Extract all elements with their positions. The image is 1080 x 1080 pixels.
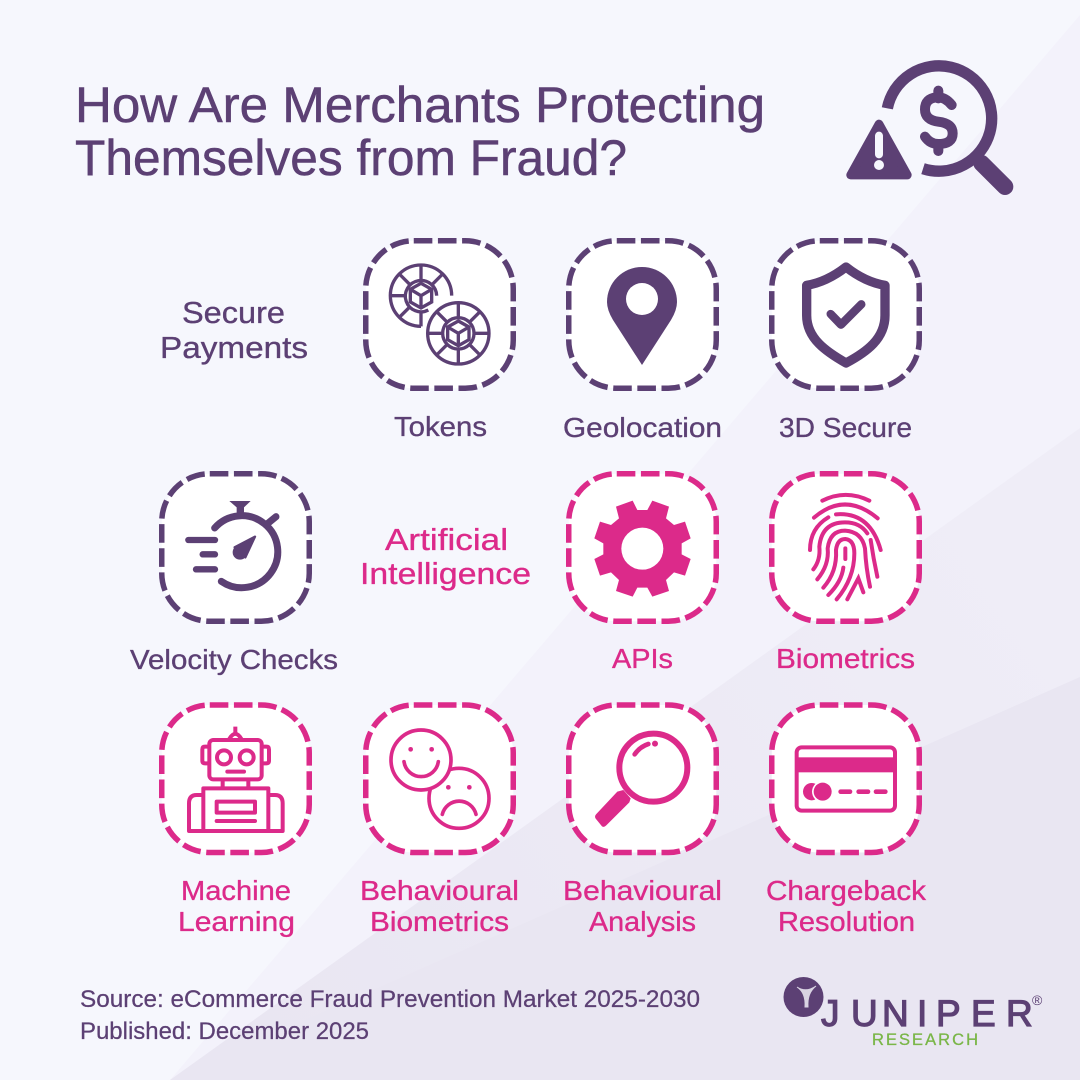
panel: Velocity Checks — [130, 474, 338, 675]
title: Themselves from Fraud? — [75, 130, 627, 186]
label: Behavioural Biometrics: Biometrics — [370, 906, 509, 937]
panel: Behavioural Analysis — [563, 705, 722, 937]
heading: Artificial Intelligence — [360, 522, 531, 591]
icon: warning triangle and dollar magnifier — [851, 66, 1005, 187]
heading: Secure Payments — [160, 295, 308, 365]
label: Behavioural Analysis — [563, 875, 722, 937]
label: Behavioural Biometrics — [360, 875, 519, 937]
panel: Behavioural Biometrics — [360, 705, 519, 937]
label: Biometrics: Biometrics — [776, 643, 915, 674]
label: Machine Learning — [178, 875, 295, 937]
heading: Artificial Intelligence: Intelligence — [360, 556, 531, 591]
icon: tokens — [390, 265, 489, 364]
icon: happy and sad faces — [391, 730, 489, 828]
panel: Tokens — [366, 241, 513, 442]
icon: robot — [189, 727, 283, 831]
title — [75, 77, 765, 186]
icon: magnifying glass — [595, 734, 687, 827]
panel: Biometrics — [772, 474, 919, 674]
source text: Source: eCommerce Fraud Prevention Market 2025-2030 — [80, 986, 700, 1013]
panel: Chargeback Resolution — [766, 705, 927, 937]
heading: Secure Payments: Secure — [182, 295, 285, 330]
label: 3D Secure: 3D Secure — [779, 412, 912, 443]
label: Tokens: Tokens — [394, 411, 487, 442]
icon: stopwatch — [188, 501, 278, 588]
label: Behavioural Analysis: Behavioural — [563, 875, 722, 906]
icon: shield — [807, 267, 885, 363]
heading: Secure Payments: Payments — [160, 330, 308, 365]
label: Chargeback Resolution — [766, 875, 927, 937]
logo: Juniper Research: RESEARCH — [872, 1031, 978, 1049]
panel: Machine Learning — [162, 705, 309, 937]
logo: Juniper Research: JUNIPER — [821, 993, 1033, 1034]
label: Machine Learning: Learning — [178, 906, 295, 937]
label: Chargeback Resolution: Resolution — [778, 906, 915, 937]
heading: Artificial Intelligence: Artificial — [385, 522, 508, 557]
label: Behavioural Analysis: Analysis — [589, 906, 696, 937]
panel: Geolocation — [563, 241, 722, 443]
logo: Juniper Research: ® — [1032, 992, 1043, 1008]
source text — [80, 986, 700, 1045]
icon: credit card — [797, 747, 895, 811]
icon: fingerprint — [810, 495, 881, 599]
icon: location pin — [607, 267, 677, 365]
label: APIs: APIs — [612, 643, 673, 674]
label: Geolocation: Geolocation — [563, 412, 722, 443]
label: Behavioural Biometrics: Behavioural — [360, 875, 519, 906]
panel: APIs — [569, 474, 716, 674]
label: Velocity Checks: Velocity Checks — [130, 644, 338, 675]
icon: gear — [594, 501, 691, 597]
label: Chargeback Resolution: Chargeback — [766, 875, 927, 906]
title: How Are Merchants Protecting — [75, 77, 765, 133]
source text: Published: December 2025 — [80, 1018, 369, 1045]
label: Machine Learning: Machine — [181, 875, 291, 906]
panel: 3D Secure — [772, 241, 919, 443]
logo: Juniper Research — [784, 977, 1043, 1049]
